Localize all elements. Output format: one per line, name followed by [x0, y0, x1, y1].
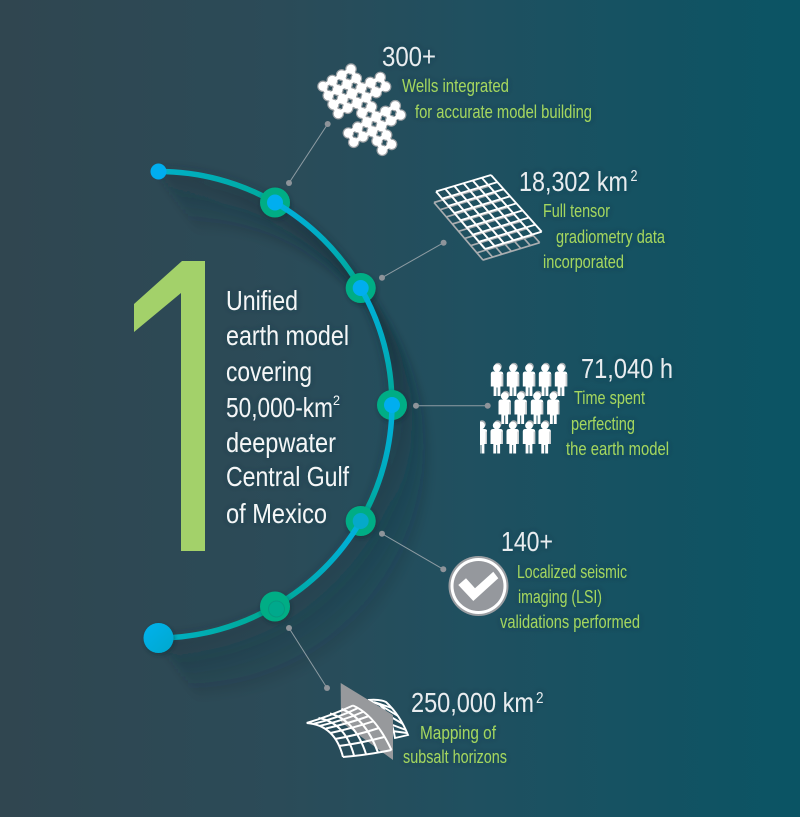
main description: 2	[333, 392, 340, 408]
stat: LSI: imaging (LSI)	[518, 586, 602, 607]
stat: wells	[382, 41, 592, 122]
main description: deepwater	[226, 427, 336, 458]
mesh in front	[307, 706, 392, 757]
stat: mapping: subsalt horizons	[403, 746, 507, 767]
stat: gradiometry	[519, 166, 666, 272]
stat: hours: the earth model	[566, 438, 669, 459]
node 5	[260, 592, 290, 622]
stat: wells: Wells integrated	[402, 75, 509, 96]
main description	[226, 285, 349, 529]
icon: wells lattice	[318, 64, 405, 155]
main description: covering	[226, 356, 312, 387]
stat: hours: Time spent	[574, 387, 645, 408]
icon: check badge	[448, 556, 508, 616]
arc start dot	[150, 164, 166, 180]
connector lines	[286, 121, 491, 691]
main description: Unified	[226, 285, 298, 316]
stat: gradiometry: incorporated	[543, 251, 624, 272]
node 2	[346, 273, 376, 303]
main description: earth model	[226, 320, 349, 351]
stat: gradiometry: gradiometry data	[556, 226, 666, 247]
stat: hours	[566, 353, 673, 459]
stat: LSI: Localized seismic	[517, 561, 627, 582]
main description: of Mexico	[226, 498, 327, 529]
mesh behind plane	[368, 700, 408, 738]
icon: subsalt surface	[307, 683, 408, 760]
main description: Central Gulf	[226, 461, 349, 492]
stat: LSI: validations performed	[500, 611, 640, 632]
stat: hours: perfecting	[571, 413, 635, 434]
stat: mapping: 2	[536, 690, 544, 707]
arc end dot	[144, 623, 174, 653]
stat: gradiometry: 2	[630, 168, 638, 185]
stat: wells: for accurate model building	[415, 101, 592, 122]
stat: gradiometry: 18,302 km	[519, 166, 628, 197]
stat: wells: 300+	[382, 41, 436, 72]
big numeral 1	[134, 261, 205, 551]
node 1	[260, 188, 290, 218]
timeline arc with nodes	[144, 164, 407, 653]
stat: LSI: 140+	[501, 526, 553, 557]
stat: LSI	[500, 526, 640, 632]
stat: hours: 71,040 h	[581, 353, 673, 384]
icon: gradiometry grids	[434, 175, 542, 260]
stat: mapping: 250,000 km	[411, 687, 534, 718]
node 3	[377, 390, 407, 420]
main description: 50,000-km	[226, 392, 333, 423]
stat: mapping: Mapping of	[420, 722, 497, 743]
icon: people	[475, 363, 567, 454]
plane	[341, 683, 393, 760]
arc long shadow	[158, 171, 429, 695]
node 4	[346, 506, 376, 536]
stat: gradiometry: Full tensor	[543, 200, 610, 221]
stat: mapping	[403, 687, 544, 767]
